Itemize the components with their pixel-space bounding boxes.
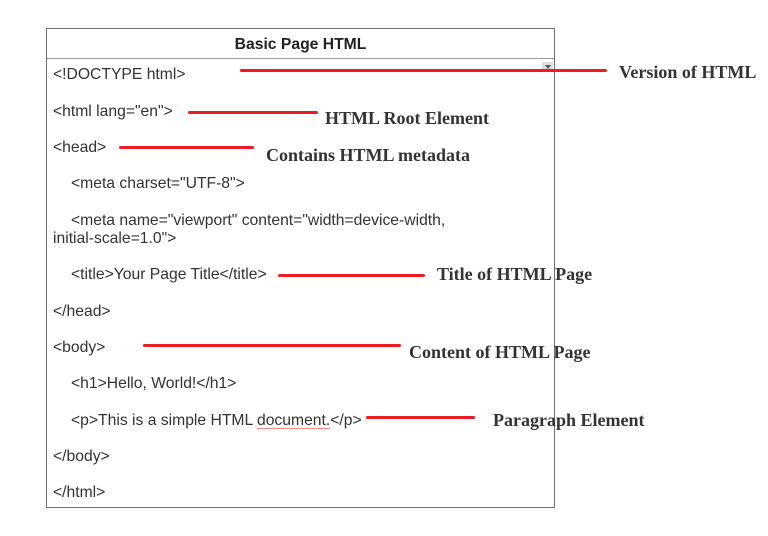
code: meta viewport: initial-scale=1.0"> — [53, 230, 176, 247]
heading: table title: Basic Page HTML — [235, 36, 366, 53]
heading: table title — [47, 29, 554, 59]
code: head close: </head> — [53, 303, 111, 320]
label: version of HTML: Version of HTML — [619, 62, 756, 82]
code: meta viewport — [53, 212, 445, 247]
code: body open: <body> — [53, 339, 105, 356]
code: h1: <h1>Hello, World!</h1> — [71, 375, 236, 392]
code: head open: <head> — [53, 139, 106, 156]
icon: dropdown button — [542, 62, 553, 72]
code: body close: </body> — [53, 448, 110, 465]
arrow: title line — [278, 274, 425, 277]
arrow: metadata line — [119, 146, 254, 149]
label: HTML root element: HTML Root Element — [325, 108, 489, 128]
label: content of HTML page: Content of HTML Page — [409, 342, 590, 362]
code: html close: </html> — [53, 484, 105, 501]
arrow: root element line — [188, 111, 318, 114]
code: meta charset: <meta charset="UTF-8"> — [71, 175, 245, 192]
code: meta viewport: <meta name="viewport" content="width=device-width, — [71, 212, 445, 229]
code: paragraph: <p>This is a simple HTML document.</p> — [71, 412, 362, 429]
arrow: paragraph line — [366, 416, 475, 419]
arrow: content line — [143, 344, 401, 347]
label: paragraph element: Paragraph Element — [493, 410, 644, 430]
label: title of HTML page: Title of HTML Page — [437, 264, 592, 284]
code: title: <title>Your Page Title</title> — [71, 266, 267, 283]
arrow: version line — [240, 69, 607, 72]
label: contains HTML metadata: Contains HTML metadata — [266, 145, 470, 165]
code: doctype: <!DOCTYPE html> — [53, 66, 186, 83]
panel: code table — [46, 28, 555, 508]
code: html open: <html lang="en"> — [53, 103, 173, 120]
